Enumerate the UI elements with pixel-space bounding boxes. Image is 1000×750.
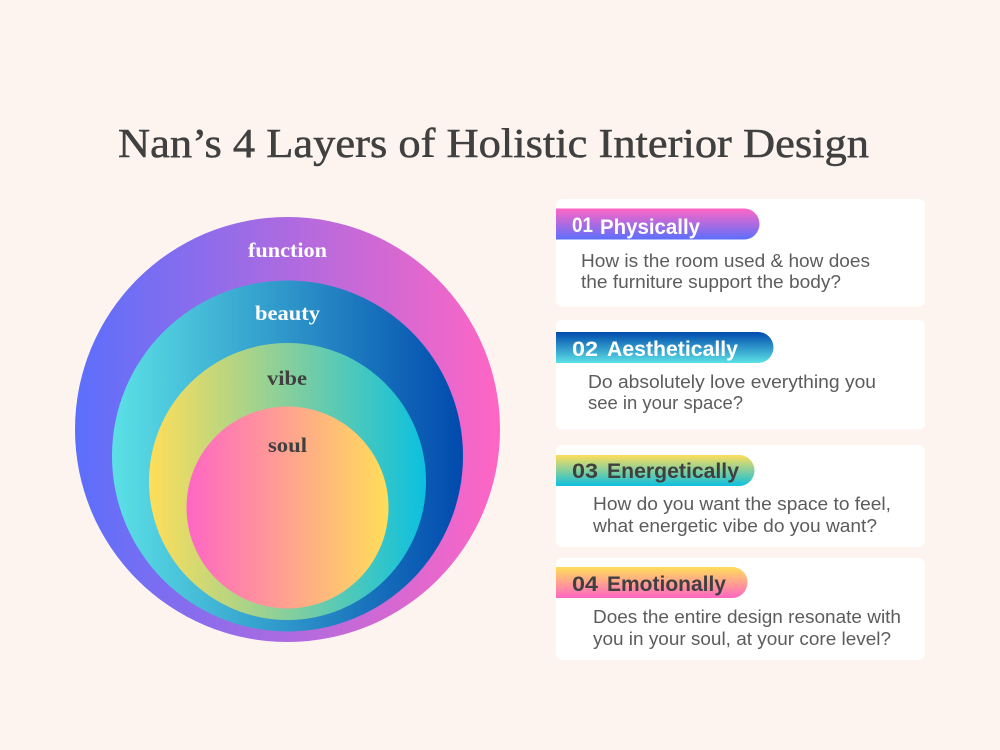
description: How do you want the space to feel, (593, 494, 891, 514)
label: vibe: vibe (267, 366, 307, 390)
panel: 04 emotionally (556, 558, 925, 660)
description (592, 494, 891, 536)
description: see in your space? (588, 393, 743, 413)
heading: Aesthetically (607, 338, 738, 361)
heading pill (556, 567, 747, 598)
card background (556, 199, 925, 306)
title: Nan’s 4 Layers of Holistic Interior Design (118, 120, 869, 166)
card background (556, 558, 925, 660)
description (593, 607, 901, 649)
number: 04 (572, 573, 598, 596)
card background (556, 445, 925, 547)
label: function: function (248, 238, 327, 262)
circle: vibe (149, 343, 426, 620)
circle: soul (186, 406, 388, 608)
description: Do absolutely love everything you (588, 372, 876, 392)
card background (556, 320, 925, 430)
label: beauty: beauty (255, 301, 321, 325)
description (581, 251, 870, 292)
number: 03 (572, 460, 598, 483)
heading: Energetically (607, 460, 739, 483)
description: How is the room used & how does (581, 251, 870, 271)
heading pill (556, 332, 774, 363)
panel: 02 aesthetically (556, 320, 925, 430)
heading: Physically (600, 216, 700, 239)
description: the furniture support the body? (581, 272, 841, 292)
number: 01 (572, 214, 593, 237)
heading pill (556, 208, 760, 240)
description: what energetic vibe do you want? (592, 516, 877, 536)
panel: 03 energetically (556, 445, 925, 547)
label: soul: soul (268, 433, 307, 457)
description: Does the entire design resonate with (593, 607, 901, 627)
heading pill (556, 455, 754, 486)
nested circles diagram (75, 217, 500, 642)
description: you in your soul, at your core level? (593, 629, 891, 649)
heading: Emotionally (607, 573, 726, 596)
circle: beauty (112, 280, 463, 632)
description (588, 372, 876, 413)
circle: function (75, 217, 500, 642)
panel: 01 physically (556, 199, 925, 306)
number: 02 (572, 338, 598, 361)
